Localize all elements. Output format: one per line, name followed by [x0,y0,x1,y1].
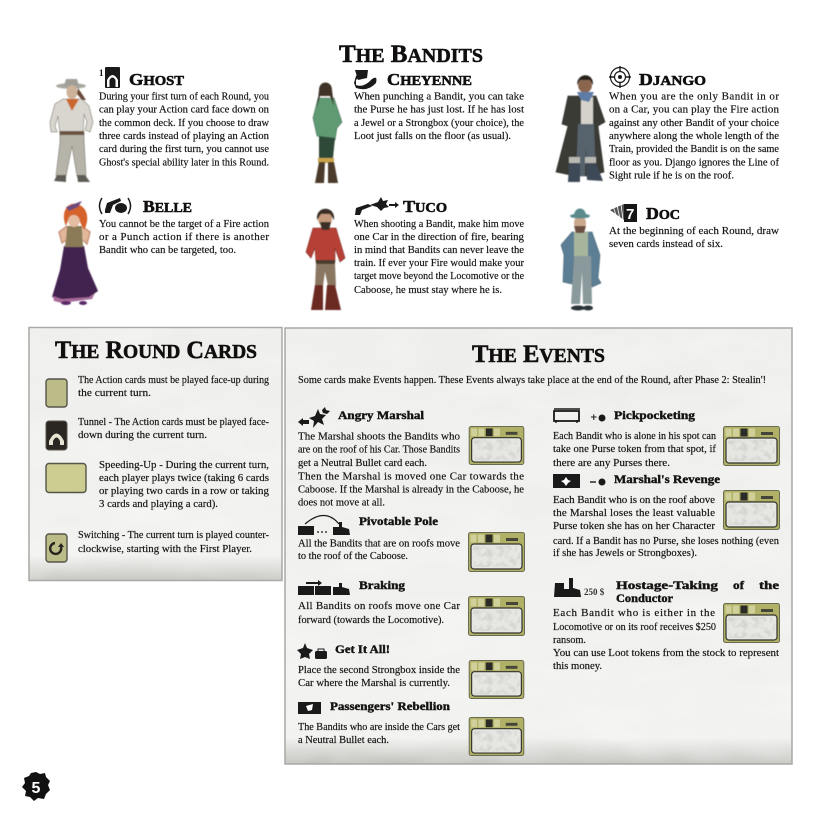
icon: tunnel card [46,421,67,450]
figure: Tuco [306,209,345,310]
heading: Passengers' Rebellion [330,699,450,713]
card [468,596,524,636]
text: Tuco ability: target move beyond the Locomotive or the [354,270,524,282]
text: speeding-up rule: each player plays twice (taking 6 cards [99,472,269,484]
text: switching rule [78,529,269,555]
text: ransom. [553,634,586,646]
text: Tuco ability: train. If ever your Fire would make your [354,257,524,269]
text: You can use Loot tokens from the stock to represent [553,647,779,659]
text: Cheyenne ability: a Jewel or a Strongbox (your choice), the [354,117,524,129]
text: speeding-up rule: Speeding-Up - During the current turn, [99,459,269,471]
icon: gun and shot arrow [355,197,399,215]
text: events intro: Some cards make Events happen. These Events always take place at the end of the Round, after Phase 2: Stealin'! [298,374,766,386]
text: tunnel rule: Tunnel - The Action cards must be played face- [78,416,269,428]
panel background [285,328,792,764]
text: switching rule: Switching - The current turn is played counter- [78,529,269,541]
text: speeding-up rule [99,459,269,510]
heading: Belle: BELLE [143,197,192,216]
icon: car with star minus purse [553,474,606,488]
text: Ghost ability: the common deck. If you choose to draw [99,117,269,129]
text: Doc ability: seven cards instead of six. [609,238,723,250]
panel: The Events [285,328,792,764]
text: Cheyenne ability: Loot just falls on the floor (as usual). [354,130,511,142]
text: Tuco ability [354,218,524,296]
panel: The Round Cards [29,328,282,580]
heading: Pivotable Pole [359,514,439,528]
text: Cheyenne ability: the Purse he has just lost. If he has lost [354,104,524,116]
figure: Ghost [50,79,93,182]
heading: Marshal's Revenge [614,472,721,486]
text: Each Bandit who is on the roof above [553,494,715,506]
title: The Bandits: THE BANDITS [339,41,483,68]
text: The Marshal shoots the Bandits who [298,430,460,442]
text: face-up rule: the current turn. [78,387,151,399]
heading: Tuco: TUCO [403,197,447,216]
event: Angry Marshal [298,407,524,508]
panel: Doc [561,204,779,310]
text [298,664,460,689]
icon: car with fist [298,702,321,714]
figure: Belle [52,201,98,305]
heading: Django: DJANGO [639,70,706,89]
text: the Marshal loses the least valuable [553,507,715,519]
event: Marshal's Revenge [553,472,780,559]
text: Each Bandit who is either in the [553,607,715,619]
icon: empty car plus purse: + [590,413,598,423]
text [553,430,716,469]
text: Django ability: Sight rule if he is on the roof. [609,170,734,182]
panel: Django [556,66,780,182]
text [553,494,779,559]
icon: empty car plus purse [554,409,606,423]
text: this money. [553,660,602,672]
event: Get It All! [297,642,524,699]
card [468,532,524,572]
heading: Cheyenne: CHEYENNE [387,70,472,89]
heading: Get It All! [335,642,390,656]
card [724,426,780,466]
text: Ghost ability: Ghost's special ability later in this Round. [99,156,269,168]
text: Each Bandit who is alone in his spot can [553,430,716,442]
heading: Braking [359,578,405,592]
heading [616,578,780,605]
heading: Conductor [616,591,674,605]
text: All Bandits on roofs move one Car [298,600,460,612]
heading: Pickpocketing [614,408,695,422]
text: switching rule: clockwise, starting with the First Player. [78,543,252,555]
text: Tuco ability: When shooting a Bandit, make him move [354,218,524,230]
text: Car where the Marshal is currently. [298,677,450,689]
text: face-up rule: The Action cards must be played face-up during [78,374,269,386]
text: forward (towards the Locomotive). [298,614,444,626]
text: Django ability: on a Car, you can play the Fire action [609,104,780,116]
text: are on the roof of his Car. Those Bandits [298,444,460,456]
card [469,660,524,699]
figure: Django [556,75,605,182]
text: Doc ability: At the beginning of each Round, draw [609,225,779,237]
text: take one Purse token from that spot, if [553,443,716,455]
text: tunnel rule [78,416,269,441]
card [724,604,780,642]
card [724,490,780,530]
icon: train moving forward [298,580,350,595]
event: Pickpocketing [553,408,780,469]
text: Caboose. If the Marshal is already in the Caboose, he [298,484,524,496]
icon: locomotive 250 dollars: 250 $ [584,587,605,597]
text: Django ability: When you are the only Bandit in or [609,90,779,102]
icon: tunnel number one: 1 [99,68,104,78]
text: Purse token she has on her Character [553,520,715,532]
text: The Bandits who are inside the Cars get [298,721,460,733]
text: Django ability [609,90,780,182]
text: if she has Jewels or Strongboxes). [553,547,697,559]
text: Cheyenne ability: When punching a Bandit, you can take [354,90,524,102]
panel: Tuco [306,197,524,310]
card [469,426,524,465]
heading: Hostage-Taking [616,578,718,592]
page number badge: 5 [32,780,41,797]
panel: Belle [52,197,269,305]
text: a Neutral Bullet each. [298,734,389,746]
text: there are any Purses there. [553,457,670,469]
icon: no gun no fist [100,198,130,214]
text: Django ability: floor as you. Django ignores the Line of [609,156,779,168]
text: Cheyenne ability [354,90,524,142]
text: Ghost ability [99,90,269,168]
figure: Cheyenne [313,82,342,183]
heading: of [733,578,745,592]
text: card. If a Bandit has no Purse, she loses nothing (even [553,535,779,547]
heading: Ghost: GHOST [129,70,184,89]
text: All the Bandits that are on roofs move [298,538,460,550]
text: Tuco ability: in mind that Bandits can never leave the [354,244,524,256]
text: to the roof of the Caboose. [298,550,408,562]
heading: Angry Marshal [338,408,425,422]
icon: switching card [46,534,67,562]
icon: seven cards [610,204,637,223]
text [553,607,779,672]
text: Django ability: Train, provided the Bandit is on the same [609,143,779,155]
text: does not move at all. [298,496,385,508]
icon: speeding-up card [46,464,86,492]
text: Then the Marshal is moved one Car towards the [298,470,524,482]
icon: face-up card [46,379,67,407]
event: Braking [298,578,524,636]
text: speeding-up rule: or playing two cards in a row or taking [99,485,269,497]
text: Place the second Strongbox inside the [298,664,460,676]
text: Django ability: anywhere along the whole length of the [609,130,779,142]
text: get a Neutral Bullet card each. [298,457,427,469]
panel: Cheyenne [313,70,524,183]
text: tunnel rule: down during the current turn. [78,429,207,441]
icon: locomotive 250 dollars [554,578,605,597]
text: Ghost ability: card during the first turn, you cannot use [99,143,269,155]
text: Belle ability: You cannot be the target of a Fire action [99,218,269,230]
text: Locomotive or on its roof receives $250 [553,621,716,633]
panel background [29,328,282,580]
text: Belle ability [99,218,269,256]
text: face-up rule [78,374,269,399]
icon: marshal star and strongbox [297,643,327,659]
event: Hostage-Taking of the Conductor [553,578,780,672]
text [298,538,460,562]
text: Ghost ability: During your first turn of each Round, you [99,90,269,102]
event: Pivotable Pole [298,514,524,572]
panel: Ghost [50,67,269,182]
icon: tunnel number one [99,67,120,88]
text: Ghost ability: can play your Action card face down on [99,104,269,116]
page number badge [22,772,50,801]
text: speeding-up rule: 3 cards and playing a card). [99,498,218,510]
card [469,717,524,756]
text: Belle ability: or a Punch action if there is another [99,231,269,243]
icon: caboose and locomotive with arc [298,516,350,535]
icon: crosshair [609,66,631,88]
text: Belle ability: Bandit who can be targeted, too. [99,244,236,256]
text [298,600,460,626]
text: Tuco ability: one Car in the direction of fire, bearing [354,231,524,243]
icon: seven cards: 7 [626,206,634,223]
heading: Doc: DOC [646,204,680,223]
heading: the [759,578,780,592]
icon: purse hand [354,70,376,89]
figure: Doc [561,208,601,310]
icon: marshal shooting [298,407,330,428]
text: Ghost ability: three cards instead of playing an Action [99,130,269,142]
text [298,430,524,508]
text [298,721,460,746]
text: Tuco ability: Caboose, he must stay where he is. [354,284,502,296]
heading: The Events: THE EVENTS [472,341,605,368]
event: Passengers' Rebellion [298,699,524,756]
text: Django ability: against any other Bandit of your choice [609,117,779,129]
text: Doc ability [609,225,779,250]
heading: The Round Cards: THE ROUND CARDS [55,337,257,364]
